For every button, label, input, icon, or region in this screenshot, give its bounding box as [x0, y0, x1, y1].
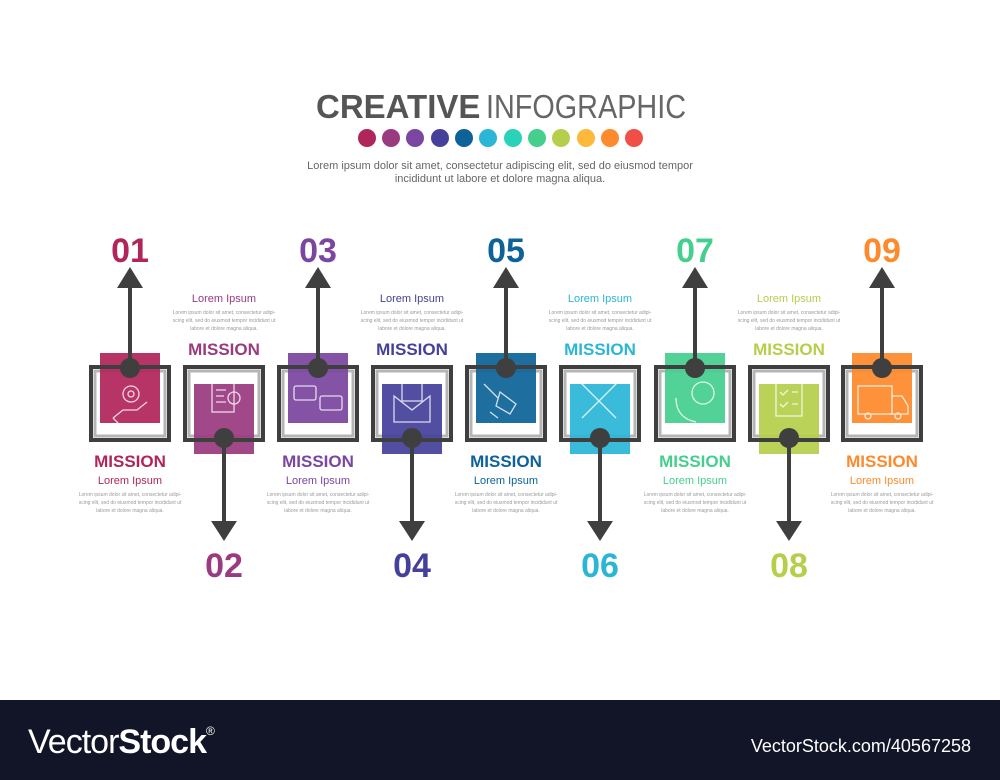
item 02: Lorem ipsum dolor sit amet, consectetur adipi- — [173, 310, 276, 316]
item 08: MISSION — [753, 340, 825, 359]
item 03: 03 — [299, 232, 337, 270]
footer bar — [0, 700, 1000, 780]
footer bar: ® — [206, 724, 215, 738]
item 06: scing elit, sed do eiusmod tempor incididunt ut — [549, 318, 652, 324]
item 05: Lorem ipsum dolor sit amet, consectetur adipi- — [455, 492, 558, 498]
item 05 — [455, 232, 558, 514]
item 04: MISSION — [376, 340, 448, 359]
item 07: 07 — [676, 232, 714, 270]
item 08: 08 — [770, 547, 808, 585]
item 09: MISSION — [846, 452, 918, 471]
item 02: labore et dolore magna aliqua. — [190, 326, 258, 332]
item 02: scing elit, sed do eiusmod tempor incididunt ut — [173, 318, 276, 324]
item 06: MISSION — [564, 340, 636, 359]
item 09: scing elit, sed do eiusmod tempor incididunt ut — [831, 500, 934, 506]
item 01: Lorem ipsum dolor sit amet, consectetur adipi- — [79, 492, 182, 498]
item 08: labore et dolore magna aliqua. — [755, 326, 823, 332]
item 01 — [79, 232, 182, 514]
item 06: Lorem ipsum dolor sit amet, consectetur adipi- — [549, 310, 652, 316]
subtitle — [307, 160, 693, 185]
item 04: Lorem Ipsum — [380, 293, 444, 305]
item 09: labore et dolore magna aliqua. — [848, 508, 916, 514]
item 04: scing elit, sed do eiusmod tempor incididunt ut — [361, 318, 464, 324]
item 03: scing elit, sed do eiusmod tempor incididunt ut — [267, 500, 370, 506]
item 03: labore et dolore magna aliqua. — [284, 508, 352, 514]
item 02 — [173, 293, 276, 585]
item 01: scing elit, sed do eiusmod tempor incididunt ut — [79, 500, 182, 506]
item 07 — [644, 232, 747, 514]
title: INFOGRAPHIC — [486, 88, 686, 125]
item 01: Lorem Ipsum — [98, 475, 162, 487]
item 08: Lorem ipsum dolor sit amet, consectetur adipi- — [738, 310, 841, 316]
footer bar: VectorStock.com/40567258 — [751, 736, 971, 756]
item 08: scing elit, sed do eiusmod tempor incididunt ut — [738, 318, 841, 324]
item 04: labore et dolore magna aliqua. — [378, 326, 446, 332]
subtitle: incididunt ut labore et dolore magna aliqua. — [395, 173, 605, 185]
item 06 — [549, 293, 652, 585]
item 07: Lorem Ipsum — [663, 475, 727, 487]
item 09: Lorem Ipsum — [850, 475, 914, 487]
item 05: labore et dolore magna aliqua. — [472, 508, 540, 514]
item 09: Lorem ipsum dolor sit amet, consectetur adipi- — [831, 492, 934, 498]
item 03 — [267, 232, 370, 514]
title — [316, 88, 686, 125]
item 07: labore et dolore magna aliqua. — [661, 508, 729, 514]
item 05: 05 — [487, 232, 525, 270]
item 02: 02 — [205, 547, 243, 585]
item 01: labore et dolore magna aliqua. — [96, 508, 164, 514]
item 09: 09 — [863, 232, 901, 270]
item 06: Lorem Ipsum — [568, 293, 632, 305]
item 03: Lorem ipsum dolor sit amet, consectetur adipi- — [267, 492, 370, 498]
item 07: scing elit, sed do eiusmod tempor incididunt ut — [644, 500, 747, 506]
item 02: Lorem Ipsum — [192, 293, 256, 305]
item 08: Lorem Ipsum — [757, 293, 821, 305]
item 07: Lorem ipsum dolor sit amet, consectetur adipi- — [644, 492, 747, 498]
item 07: MISSION — [659, 452, 731, 471]
item 06: labore et dolore magna aliqua. — [566, 326, 634, 332]
item 05: Lorem Ipsum — [474, 475, 538, 487]
item 02: MISSION — [188, 340, 260, 359]
item 09 — [831, 232, 934, 514]
item 08 — [738, 293, 841, 585]
item 01: 01 — [111, 232, 149, 270]
item 03: Lorem Ipsum — [286, 475, 350, 487]
title: CREATIVE — [316, 88, 480, 125]
item 04: Lorem ipsum dolor sit amet, consectetur adipi- — [361, 310, 464, 316]
item 01: MISSION — [94, 452, 166, 471]
item 05: scing elit, sed do eiusmod tempor incididunt ut — [455, 500, 558, 506]
subtitle: Lorem ipsum dolor sit amet, consectetur adipiscing elit, sed do eiusmod tempor — [307, 160, 693, 172]
item 05: MISSION — [470, 452, 542, 471]
item 03: MISSION — [282, 452, 354, 471]
item 04: 04 — [393, 547, 431, 585]
footer bar: VectorStock — [28, 723, 206, 761]
item 04 — [361, 293, 464, 585]
item 06: 06 — [581, 547, 619, 585]
color dots — [358, 129, 643, 147]
